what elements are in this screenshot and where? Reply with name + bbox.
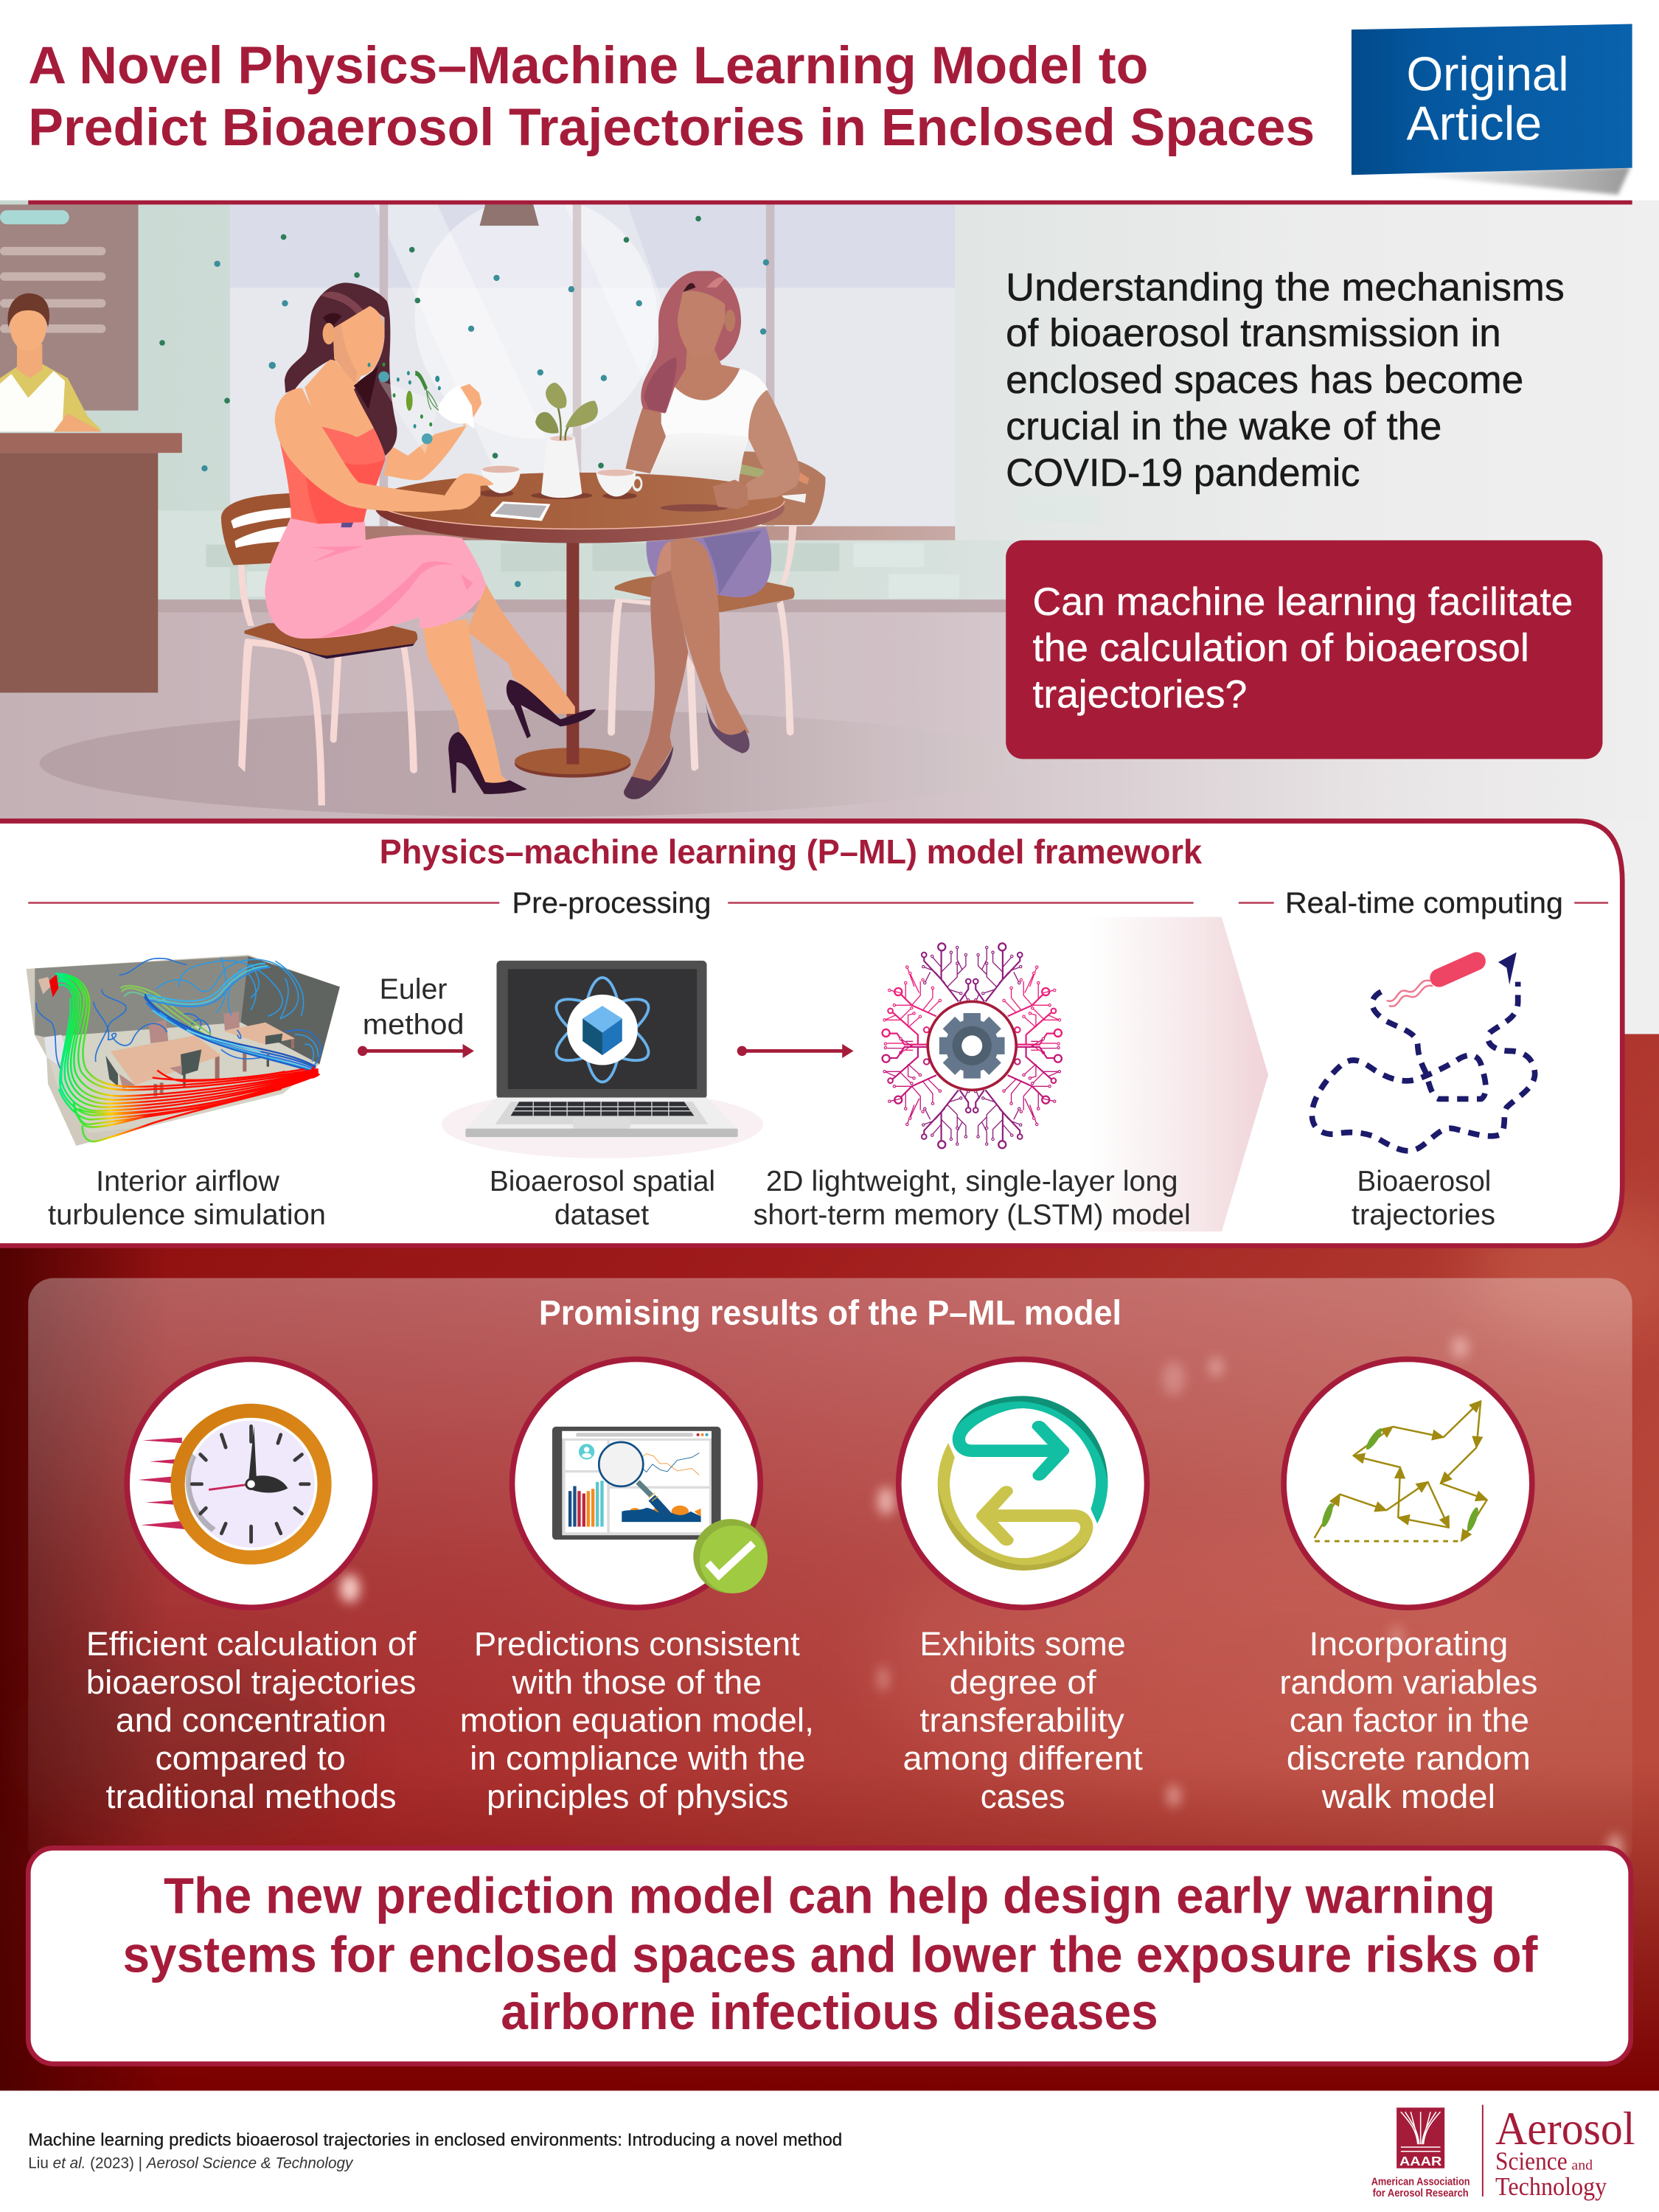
right chair — [608, 451, 825, 771]
result 2 caption: Predictions consistent — [474, 1625, 800, 1663]
icon: LSTM circuit gear — [883, 943, 1062, 1148]
table top — [375, 473, 785, 543]
caption: trajectories: trajectories — [1352, 1199, 1495, 1231]
caption: LSTM model: 2D lightweight, single-layer long — [766, 1165, 1178, 1197]
result 3 caption: Exhibits some — [919, 1625, 1126, 1663]
rule under title — [28, 201, 1632, 204]
woman: left, body — [265, 282, 596, 794]
result 4 caption: discrete random — [1287, 1739, 1531, 1777]
window — [141, 196, 955, 540]
title: Predict Bioaerosol Trajectories in Enclosed Spaces — [28, 98, 1315, 157]
label: euler method: Euler — [380, 973, 448, 1006]
badge: original article — [1352, 24, 1632, 195]
bacteria and tissue near face — [368, 362, 481, 454]
logo: AAAR: for Aerosol Research — [1373, 2188, 1469, 2199]
logo: AAAR: AAAR — [1399, 2154, 1442, 2168]
vase, plant and cup — [531, 383, 641, 499]
chart: airflow simulation room — [27, 955, 340, 1146]
upper airflow band — [120, 964, 316, 1071]
citation: Liu et al. (2023) | Aerosol Science & Technology — [28, 2155, 354, 2172]
framework heading: Physics–machine learning (P–ML) model framework — [380, 832, 1203, 871]
hero text: of bioaerosol transmission in — [1006, 312, 1501, 355]
hero text: enclosed spaces has become — [1006, 358, 1523, 402]
caption: trajectories — [1352, 1165, 1495, 1231]
result 3 caption: cases — [981, 1778, 1065, 1815]
pre-processing header: Pre-processing — [512, 886, 711, 919]
hero text — [1006, 266, 1565, 495]
atom logo — [548, 978, 657, 1082]
conclusion box: systems for enclosed spaces and lower the exposure risks of — [122, 1927, 1538, 1983]
result 3 caption — [902, 1625, 1143, 1815]
result 2: tablet analysis icon — [512, 1359, 768, 1607]
arrow: dataset to model — [737, 1044, 854, 1058]
conclusion box: The new prediction model can help design early warning — [164, 1867, 1495, 1924]
result 2 caption — [460, 1625, 814, 1815]
conclusion box: airborne infectious diseases — [501, 1983, 1158, 2040]
question box: trajectories? — [1033, 673, 1247, 717]
result 1 caption: bioaerosol trajectories — [86, 1663, 416, 1701]
result 4 caption: walk model — [1321, 1778, 1495, 1815]
arrow: simulation to dataset — [358, 1044, 474, 1058]
caption: trajectories: Bioaerosol — [1357, 1165, 1491, 1197]
thin blue loops — [36, 959, 321, 1071]
caption: LSTM model: short-term memory (LSTM) model — [754, 1199, 1191, 1231]
counter — [0, 433, 182, 692]
caption: airflow — [48, 1165, 326, 1231]
result 2 caption: in compliance with the — [470, 1739, 805, 1777]
result 1 caption — [86, 1625, 417, 1815]
lamp — [480, 204, 539, 226]
result 4 caption: can factor in the — [1290, 1702, 1529, 1739]
result 4 caption: random variables — [1279, 1663, 1537, 1701]
result 1 caption: traditional methods — [105, 1778, 397, 1815]
hero text: crucial in the wake of the — [1006, 405, 1441, 448]
woman right: arm and hand — [713, 390, 799, 509]
question box: Can machine learning facilitate — [1033, 580, 1573, 624]
icon: laptop — [442, 961, 763, 1158]
result 3 caption: transferability — [919, 1702, 1124, 1739]
caption: airflow: turbulence simulation — [48, 1199, 326, 1231]
citation: Machine learning predicts bioaerosol trajectories in enclosed environments: Introducing a novel method — [28, 2130, 842, 2150]
caption: airflow: Interior airflow — [96, 1165, 279, 1197]
result 1 caption: Efficient calculation of — [86, 1625, 417, 1663]
question box: the calculation of bioaerosol — [1033, 626, 1529, 669]
result 4 caption: Incorporating — [1310, 1625, 1508, 1663]
real-time computing header: Real-time computing — [1285, 886, 1563, 919]
logo: journal: Science — [1495, 2148, 1568, 2176]
logo: journal — [1482, 2103, 1635, 2201]
footer band — [0, 2090, 1659, 2212]
check badge — [693, 1519, 768, 1593]
title: A Novel Physics–Machine Learning Model to — [28, 36, 1148, 95]
result 4 caption — [1279, 1625, 1537, 1815]
menu board — [0, 204, 139, 411]
result 1 caption: and concentration — [116, 1702, 386, 1739]
result 4: random walk icon — [1284, 1359, 1532, 1607]
badge: original article: Article — [1407, 96, 1542, 150]
woman left: near arm and hand — [275, 388, 551, 521]
logo: AAAR: American Association — [1371, 2177, 1470, 2188]
badge: original article: Original — [1407, 46, 1569, 100]
red to green airflow bundle — [55, 974, 319, 1141]
citation — [28, 2130, 842, 2172]
woman: right, body — [624, 271, 771, 799]
caption: dataset — [490, 1165, 715, 1231]
result 3 caption: degree of — [950, 1663, 1096, 1701]
logo: journal: Technology — [1495, 2173, 1607, 2201]
barista — [0, 293, 102, 431]
result 2 caption: principles of physics — [487, 1778, 789, 1815]
result 1: clock icon — [127, 1359, 375, 1607]
label: euler method: method — [363, 1008, 464, 1040]
chevron — [1086, 917, 1268, 1231]
bioaerosol particles — [159, 216, 769, 587]
title — [28, 36, 1315, 157]
caption: LSTM model — [754, 1165, 1191, 1231]
caption: dataset: Bioaerosol spatial — [490, 1165, 715, 1197]
result 2 caption: with those of the — [511, 1663, 762, 1701]
panel: hero cafe scene — [0, 196, 1659, 1047]
result 2 caption: motion equation model, — [460, 1702, 814, 1739]
red textured background — [0, 1034, 1659, 2090]
logo: journal: Aerosol — [1495, 2103, 1635, 2154]
logo: journal: and — [1571, 2158, 1593, 2174]
panel: results — [28, 1278, 1632, 1871]
logo: AAAR — [1371, 2107, 1470, 2199]
caption: dataset: dataset — [554, 1199, 649, 1231]
results heading: Promising results of the P–ML model — [539, 1294, 1121, 1332]
question box — [1006, 540, 1602, 759]
result 1 caption: compared to — [155, 1739, 346, 1777]
table pedestal — [515, 538, 630, 778]
hero text: COVID-19 pandemic — [1006, 451, 1360, 495]
left chair — [221, 493, 418, 805]
hero text: Understanding the mechanisms — [1006, 266, 1565, 310]
result 3: circular arrows icon — [899, 1359, 1147, 1607]
panel: framework — [0, 821, 1622, 1245]
icon: bioaerosol trajectory — [1312, 949, 1535, 1151]
conclusion box — [28, 1848, 1631, 2064]
label: euler method — [363, 973, 464, 1040]
result 3 caption: among different — [902, 1739, 1143, 1777]
